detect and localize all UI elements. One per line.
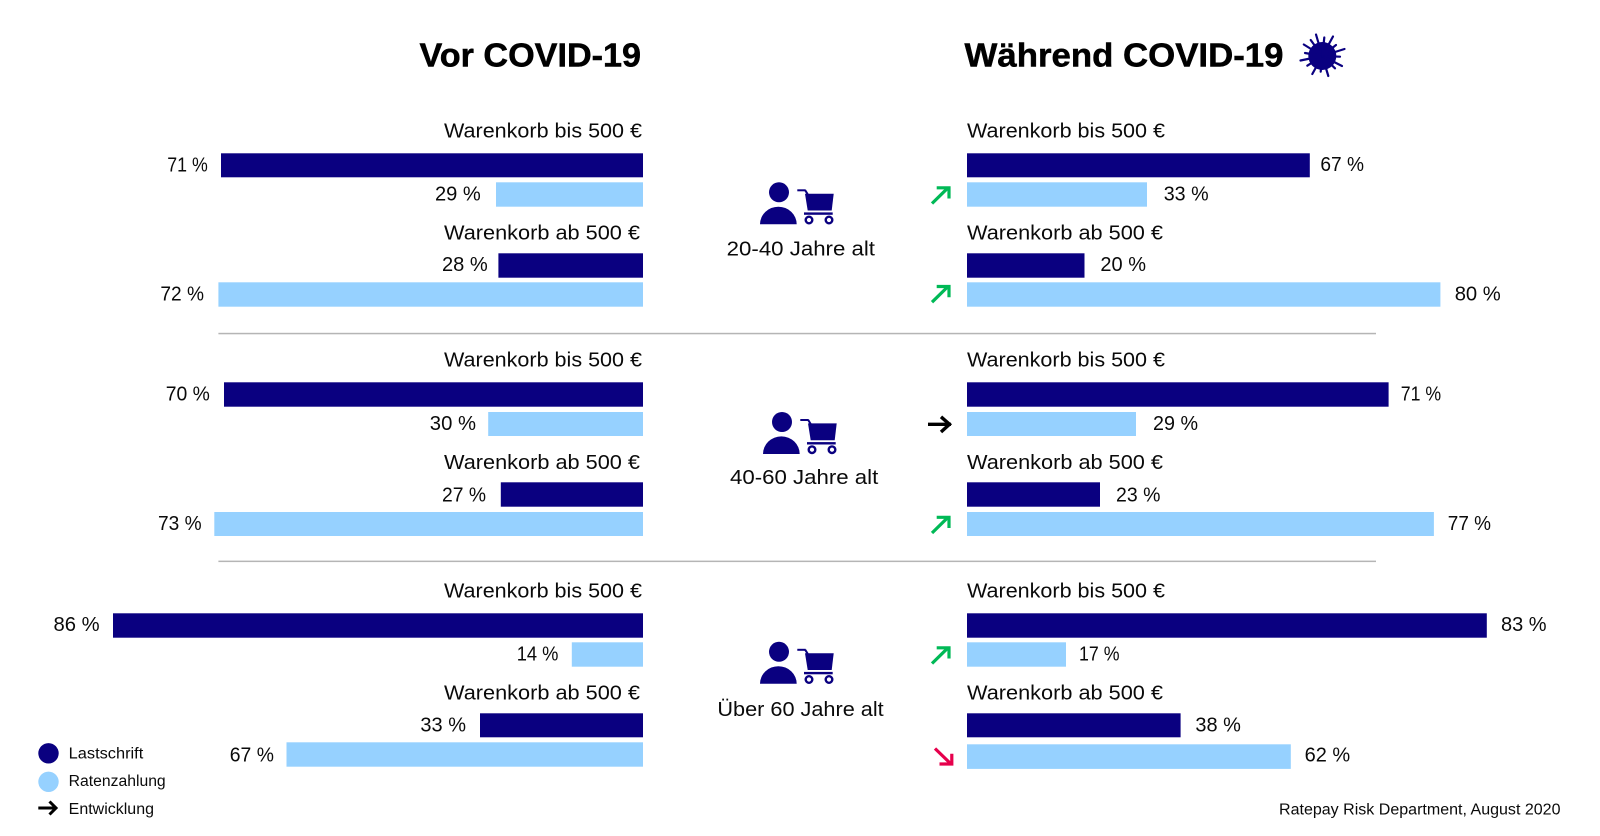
bar: Ratenzahlung 30 %: 30 % xyxy=(430,412,476,435)
bar: Ratenzahlung 67 %: 67 % xyxy=(230,744,274,767)
label: Warenkorb ab 500 €: Warenkorb ab 500 € xyxy=(444,451,641,474)
bar: Lastschrift 70 % xyxy=(166,382,643,407)
bar: Ratenzahlung 33 %: 33 % xyxy=(1164,183,1209,206)
label: Warenkorb ab 500 €: Warenkorb ab 500 € xyxy=(444,681,641,704)
panel: über 60 Jahre, während COVID-19 xyxy=(932,579,1547,769)
bar: Ratenzahlung 33 % xyxy=(967,182,1209,207)
bar: Ratenzahlung 29 % xyxy=(967,412,1198,436)
bar: Ratenzahlung 80 %: 80 % xyxy=(1455,282,1501,305)
bar: Ratenzahlung 62 % xyxy=(967,744,1350,769)
bar: Lastschrift 33 % xyxy=(420,713,643,737)
label: Warenkorb ab 500 €: Warenkorb ab 500 € xyxy=(967,681,1164,704)
bar: Lastschrift 71 %: 71 % xyxy=(167,154,208,176)
bar: Ratenzahlung 14 % xyxy=(517,642,643,667)
bar: Lastschrift 27 % xyxy=(442,482,643,507)
panel: 20-40 Jahre, während COVID-19 xyxy=(932,119,1501,307)
bar: Lastschrift 67 %: 67 % xyxy=(1320,153,1364,176)
bar: Ratenzahlung 29 %: 29 % xyxy=(435,183,481,206)
bar: Lastschrift 38 %: 38 % xyxy=(1195,713,1241,736)
bar: Ratenzahlung 29 %: 29 % xyxy=(1153,412,1198,435)
bar: Lastschrift 27 %: 27 % xyxy=(442,484,486,507)
icon: person with cart 20-40 xyxy=(760,182,834,224)
legend item: Entwicklung: Entwicklung xyxy=(69,801,154,818)
bar: Lastschrift 23 % xyxy=(967,482,1160,507)
bar: Lastschrift 38 % xyxy=(967,713,1241,737)
bar: Lastschrift 71 % xyxy=(167,153,643,177)
bar: Lastschrift 20 %: 20 % xyxy=(1100,253,1146,276)
panel: über 60 Jahre, vor COVID-19 xyxy=(54,579,643,767)
bar: Lastschrift 23 %: 23 % xyxy=(1116,484,1160,507)
bar: Lastschrift 71 % xyxy=(967,382,1441,407)
bar: Ratenzahlung 73 %: 73 % xyxy=(158,512,202,535)
arrow: up green xyxy=(932,188,949,204)
icon: virus xyxy=(1300,34,1344,76)
bar: Lastschrift 70 %: 70 % xyxy=(166,383,210,406)
label: Warenkorb ab 500 €: Warenkorb ab 500 € xyxy=(967,221,1164,244)
icon: person with cart 40-60 xyxy=(763,412,837,454)
bar: Ratenzahlung 77 % xyxy=(967,512,1491,536)
label: Warenkorb bis 500 €: Warenkorb bis 500 € xyxy=(967,119,1166,142)
arrow: up green xyxy=(932,286,949,302)
heading: Vor COVID-19: Vor COVID-19 xyxy=(420,37,641,74)
bar: Lastschrift 20 % xyxy=(967,253,1146,278)
label: Warenkorb bis 500 €: Warenkorb bis 500 € xyxy=(444,119,643,142)
bar: Ratenzahlung 62 %: 62 % xyxy=(1305,744,1350,767)
label: Warenkorb ab 500 €: Warenkorb ab 500 € xyxy=(444,221,641,244)
label: Warenkorb bis 500 €: Warenkorb bis 500 € xyxy=(967,579,1166,602)
label: Über 60 Jahre alt: Über 60 Jahre alt xyxy=(717,698,884,721)
source note: Ratepay Risk Department, August 2020 xyxy=(1279,801,1561,818)
legend xyxy=(38,743,166,818)
bar: Lastschrift 83 %: 83 % xyxy=(1501,613,1547,636)
bar: Lastschrift 28 % xyxy=(442,253,643,278)
bar: Ratenzahlung 73 % xyxy=(158,512,643,536)
panel: 40-60 Jahre, während COVID-19 xyxy=(928,349,1491,536)
bar: Ratenzahlung 17 %: 17 % xyxy=(1079,643,1120,666)
legend item: Lastschrift: Lastschrift xyxy=(69,745,144,762)
arrow: right black xyxy=(928,417,951,432)
bar: Lastschrift 71 %: 71 % xyxy=(1401,383,1441,406)
bar: Ratenzahlung 80 % xyxy=(967,282,1501,307)
bar: Lastschrift 28 %: 28 % xyxy=(442,253,488,276)
icon: person with cart über 60 xyxy=(760,642,834,684)
legend item: Ratenzahlung: Ratenzahlung xyxy=(69,773,166,790)
bar: Ratenzahlung 29 % xyxy=(435,182,643,207)
bar: Ratenzahlung 72 %: 72 % xyxy=(160,283,204,306)
arrow: up green xyxy=(932,517,949,533)
bar: Ratenzahlung 67 % xyxy=(230,742,643,767)
label: Warenkorb ab 500 €: Warenkorb ab 500 € xyxy=(967,451,1164,474)
arrow: down red xyxy=(935,748,952,764)
label: 20-40 Jahre alt: 20-40 Jahre alt xyxy=(727,238,875,261)
bar: Ratenzahlung 14 %: 14 % xyxy=(517,643,558,666)
bar: Lastschrift 86 % xyxy=(54,613,643,638)
heading: Während COVID-19: Während COVID-19 xyxy=(964,37,1284,74)
bar: Lastschrift 67 % xyxy=(967,153,1364,177)
bar: Ratenzahlung 17 % xyxy=(967,642,1120,667)
label: Warenkorb bis 500 €: Warenkorb bis 500 € xyxy=(444,349,643,372)
bar: Ratenzahlung 30 % xyxy=(430,412,643,436)
label: Warenkorb bis 500 €: Warenkorb bis 500 € xyxy=(967,349,1166,372)
bar: Lastschrift 83 % xyxy=(967,613,1547,638)
bar: Ratenzahlung 72 % xyxy=(160,282,643,307)
panel: 40-60 Jahre, vor COVID-19 xyxy=(158,349,643,536)
label: Warenkorb bis 500 €: Warenkorb bis 500 € xyxy=(444,579,643,602)
bar: Lastschrift 33 %: 33 % xyxy=(420,713,466,736)
bar: Lastschrift 86 %: 86 % xyxy=(54,613,100,636)
panel: 20-40 Jahre, vor COVID-19 xyxy=(160,119,643,307)
label: 40-60 Jahre alt: 40-60 Jahre alt xyxy=(730,466,879,489)
arrow: up green xyxy=(932,648,949,664)
bar: Ratenzahlung 77 %: 77 % xyxy=(1448,512,1491,535)
